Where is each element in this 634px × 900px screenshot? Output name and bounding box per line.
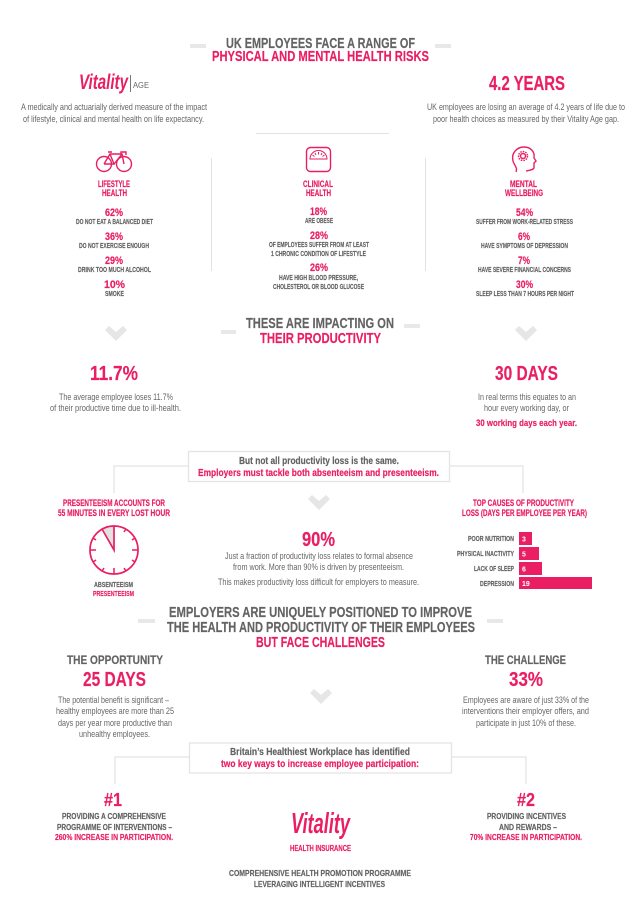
panel: Vitality Age definition <box>21 71 207 125</box>
panel: 11.7% stat: The average employee loses 11.7% <box>59 392 173 403</box>
panel: lifestyle health: HEALTH <box>102 188 127 199</box>
text: Vitality Age description <box>21 102 207 125</box>
panel: lifestyle health: 62% <box>105 207 123 219</box>
panel: mental wellbeing: SUFFER FROM WORK-RELATED STRESS <box>476 217 573 226</box>
heading: employers: EMPLOYERS ARE UNIQUELY POSITIONED TO IMPROVE <box>169 605 472 621</box>
panel: lifestyle health: DO NOT EAT A BALANCED DIET <box>76 217 153 226</box>
panel: mental wellbeing: MENTAL <box>510 179 537 190</box>
panel: way 2: AND REWARDS – <box>499 823 557 832</box>
panel: 4.2 years <box>427 73 625 125</box>
callout: two key ways box: Britain’s Healthiest Workplace has identified <box>230 747 410 758</box>
panel: presenteeism clock: PRESENTEEISM <box>93 589 134 598</box>
heading: employers <box>138 605 503 651</box>
logo: Vitality Health Insurance: HEALTH INSURANCE <box>290 844 351 853</box>
icon: lower chevron <box>310 689 332 704</box>
panel: 11.7% stat: of their productive time due to ill-health. <box>50 403 181 414</box>
panel: way 2: 70% INCREASE IN PARTICIPATION. <box>470 833 582 842</box>
title <box>190 36 451 65</box>
panel: clinical health: OF EMPLOYEES SUFFER FROM AT LEAST <box>269 240 369 249</box>
panel: mental wellbeing: SLEEP LESS THAN 7 HOURS PER NIGHT <box>476 289 574 298</box>
bar chart: 3 <box>522 536 526 544</box>
panel: way 1: #1 <box>104 790 122 810</box>
panel: the challenge: THE CHALLENGE <box>485 653 566 667</box>
panel: way 1: PROVIDING A COMPREHENSIVE <box>62 812 167 821</box>
panel: mental wellbeing: HAVE SYMPTOMS OF DEPRESSION <box>481 241 568 250</box>
panel: lifestyle health: LIFESTYLE <box>98 179 130 190</box>
icon: bicycle <box>96 152 132 172</box>
panel: 30 days stat: hour every working day, or <box>484 403 569 414</box>
panel: the challenge: participate in just 10% of these. <box>476 718 576 729</box>
panel: the opportunity <box>56 653 174 740</box>
callout: productivity loss box <box>114 452 523 493</box>
panel: 11.7% stat: 11.7% <box>90 363 138 385</box>
bar chart: PHYSICAL INACTIVITY <box>457 549 514 558</box>
panel: mental wellbeing: 30% <box>516 279 533 291</box>
text: Vitality Age description: of lifestyle, clinical and mental health on life expectancy. <box>23 114 204 125</box>
callout: two key ways box <box>115 743 526 784</box>
panel: lifestyle health: 36% <box>105 231 123 243</box>
panel: clinical health: CLINICAL <box>303 179 333 190</box>
panel: way 1 <box>55 790 173 842</box>
heading: employers: THE HEALTH AND PRODUCTIVITY OF THEIR EMPLOYEES <box>167 620 475 636</box>
panel: lifestyle health: SMOKE <box>105 289 124 298</box>
text: Vitality Age description: A medically and actuarially derived measure of the impact <box>21 102 207 113</box>
panel: top causes: TOP CAUSES OF PRODUCTIVITY <box>473 498 574 508</box>
bar chart: DEPRESSION <box>480 579 514 588</box>
panel: the challenge: Employees are aware of just 33% of the <box>463 695 589 706</box>
panel: clinical health: 28% <box>310 230 328 242</box>
panel: clinical health: 1 CHRONIC CONDITION OF LIFESTYLE <box>271 249 366 258</box>
panel: lifestyle health: 29% <box>105 255 123 267</box>
bar chart: 19 <box>522 581 530 588</box>
text: programme summary: LEVERAGING INTELLIGENT INCENTIVES <box>254 879 385 889</box>
panel: the opportunity: days per year more productive than <box>58 718 172 729</box>
bar chart: LACK OF SLEEP <box>474 564 514 573</box>
panel: presenteeism clock <box>58 498 170 598</box>
panel: clinical health: 26% <box>310 262 328 274</box>
panel: the opportunity: healthy employees are more than 25 <box>56 706 174 717</box>
panel: presenteeism clock: 55 MINUTES IN EVERY LOST HOUR <box>58 508 170 518</box>
panel: the challenge: interventions their employer offers, and <box>462 706 589 717</box>
chart: clock <box>90 526 138 574</box>
icon: right chevron <box>515 326 537 341</box>
icon: left chevron <box>105 326 127 341</box>
title: PHYSICAL AND MENTAL HEALTH RISKS <box>212 49 429 65</box>
panel: 90% stat: 90% <box>302 529 335 551</box>
panel: clinical health <box>269 148 369 291</box>
panel: 90% stat <box>218 529 419 588</box>
bar chart: 5 <box>522 552 526 558</box>
panel: 90% stat: This makes productivity loss difficult for employers to measure. <box>218 577 419 588</box>
panel: clinical health: HAVE HIGH BLOOD PRESSURE, <box>279 273 358 282</box>
panel: clinical health: 18% <box>310 206 327 218</box>
text: programme summary <box>229 868 411 889</box>
panel: way 2: #2 <box>517 790 535 810</box>
panel: the opportunity: 25 DAYS <box>83 669 146 691</box>
panel: 11.7% stat <box>50 363 181 414</box>
panel: lifestyle health: 10% <box>104 279 125 291</box>
panel: 30 days stat: 30 working days each year. <box>476 418 577 429</box>
icon: weighing scale <box>306 148 330 172</box>
panel: mental wellbeing: 7% <box>518 255 530 267</box>
heading: employers: BUT FACE CHALLENGES <box>256 635 385 651</box>
panel: mental wellbeing: WELLBEING <box>505 188 543 199</box>
callout: productivity loss box: Employers must tackle both absenteeism and presenteeism. <box>198 468 439 479</box>
panel: clinical health: HEALTH <box>306 188 331 199</box>
panel: presenteeism clock: PRESENTEEISM ACCOUNTS FOR <box>63 498 165 508</box>
icon: centre chevron <box>308 495 330 510</box>
panel: lifestyle health <box>76 152 153 298</box>
callout: two key ways box: two key ways to increase employee participation: <box>221 759 419 770</box>
heading: productivity: THEIR PRODUCTIVITY <box>260 331 381 347</box>
panel: 30 days stat: 30 DAYS <box>495 363 558 385</box>
panel: 90% stat: Just a fraction of productivity loss relates to formal absence <box>225 551 413 562</box>
panel: way 1: PROGRAMME OF INTERVENTIONS – <box>57 823 172 832</box>
bar chart: POOR NUTRITION <box>468 534 514 543</box>
panel: mental wellbeing <box>476 147 574 298</box>
panel: the challenge <box>462 653 589 729</box>
panel: 4.2 years: 4.2 YEARS <box>489 73 565 95</box>
text: programme summary: COMPREHENSIVE HEALTH PROMOTION PROGRAMME <box>229 868 411 878</box>
callout: productivity loss box: But not all productivity loss is the same. <box>239 456 399 467</box>
bar chart <box>457 532 592 589</box>
logo: Vitality Health Insurance <box>290 808 351 853</box>
panel: mental wellbeing: 54% <box>516 207 533 219</box>
logo: Vitality Health Insurance: Vitality <box>291 808 351 840</box>
heading: productivity <box>221 316 420 347</box>
panel: way 2: PROVIDING INCENTIVES <box>487 812 567 821</box>
heading: productivity: THESE ARE IMPACTING ON <box>246 316 394 332</box>
panel: mental wellbeing: 6% <box>518 231 530 243</box>
panel: the opportunity: The potential benefit is significant – <box>58 695 170 706</box>
icon: head with gear <box>513 147 536 172</box>
panel: lifestyle health: DRINK TOO MUCH ALCOHOL <box>78 265 151 274</box>
logo: Vitality Age: Vitality <box>79 71 129 94</box>
panel: way 1: 260% INCREASE IN PARTICIPATION. <box>55 833 173 842</box>
logo: Vitality Age: AGE <box>133 80 149 90</box>
panel: 90% stat: from work. More than 90% is driven by presenteeism. <box>233 562 404 573</box>
panel: 30 days stat <box>476 363 577 429</box>
panel: way 2 <box>470 790 582 842</box>
panel: clinical health: CHOLESTEROL OR BLOOD GLUCOSE <box>273 282 364 291</box>
panel: the opportunity: THE OPPORTUNITY <box>67 653 163 667</box>
panel: the opportunity: unhealthy employees. <box>79 729 150 740</box>
panel: mental wellbeing: HAVE SEVERE FINANCIAL CONCERNS <box>478 265 571 274</box>
panel: clinical health: ARE OBESE <box>305 216 333 225</box>
panel: presenteeism clock: ABSENTEEISM <box>94 580 133 589</box>
title: UK EMPLOYEES FACE A RANGE OF <box>226 36 415 52</box>
bar chart: 6 <box>522 566 526 574</box>
panel: the challenge: 33% <box>509 669 543 691</box>
panel: lifestyle health: DO NOT EXERCISE ENOUGH <box>79 241 149 250</box>
panel: top causes <box>457 498 592 589</box>
panel: 30 days stat: In real terms this equates to an <box>478 392 576 403</box>
